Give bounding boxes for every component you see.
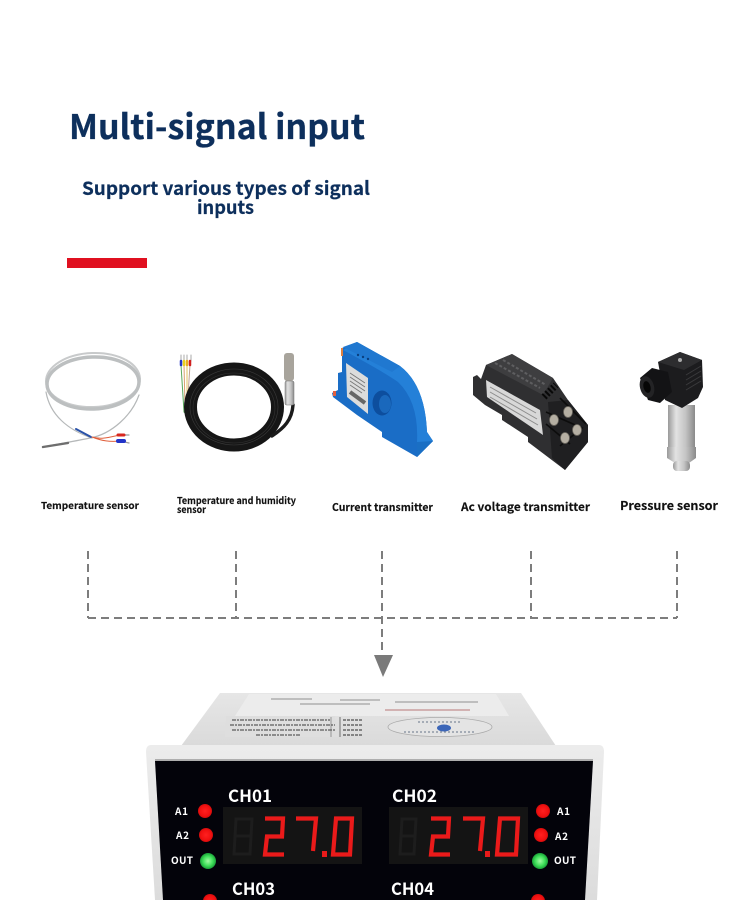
device bezel — [146, 745, 604, 900]
dashed connector lines — [88, 551, 677, 655]
label: temperature and humidity sensor — [177, 493, 297, 516]
red accent bar — [67, 258, 147, 268]
device rating label — [225, 694, 509, 737]
label: temperature sensor: Temperature sensor — [41, 498, 140, 512]
indicators right: A2 — [554, 828, 568, 843]
indicators left: A1 — [174, 803, 188, 818]
icon: ac voltage transmitter — [473, 354, 588, 470]
channel title: CH04: CH04 — [391, 875, 434, 900]
label: temperature and humidity sensor: sensor — [177, 502, 207, 516]
device top face — [181, 693, 556, 746]
icon: pressure sensor — [637, 352, 703, 471]
label: temperature and humidity sensor: Temperature and humidity — [177, 493, 297, 507]
indicators right — [531, 803, 576, 900]
arrow — [374, 655, 393, 677]
label: current transmitter: Current transmitter — [332, 500, 433, 515]
label: pressure sensor: Pressure sensor — [620, 497, 719, 514]
device display panel — [155, 761, 593, 900]
icon: current transmitter — [332, 342, 433, 457]
readout CH02 — [389, 807, 528, 864]
channel title: CH03: CH03 — [232, 875, 275, 900]
indicators right: A1 — [556, 803, 570, 818]
indicators right: OUT — [554, 852, 576, 867]
title: Multi-signal input — [69, 100, 365, 149]
subtitle: Support various types of signal — [82, 175, 370, 201]
channel title: CH02: CH02 — [392, 782, 437, 807]
indicators left: A2 — [175, 827, 189, 842]
indicators left — [171, 803, 217, 900]
readout CH01 — [223, 807, 362, 864]
subtitle: inputs — [197, 194, 254, 220]
icon: temperature sensor — [43, 351, 141, 447]
controller device — [146, 693, 604, 900]
subtitle — [82, 175, 370, 220]
channel title: CH01: CH01 — [228, 782, 272, 807]
device logo — [388, 718, 492, 736]
label: ac voltage transmitter: Ac voltage transmitter — [460, 499, 591, 515]
indicators left: OUT — [171, 852, 193, 867]
icon: temperature and humidity sensor — [181, 353, 294, 445]
